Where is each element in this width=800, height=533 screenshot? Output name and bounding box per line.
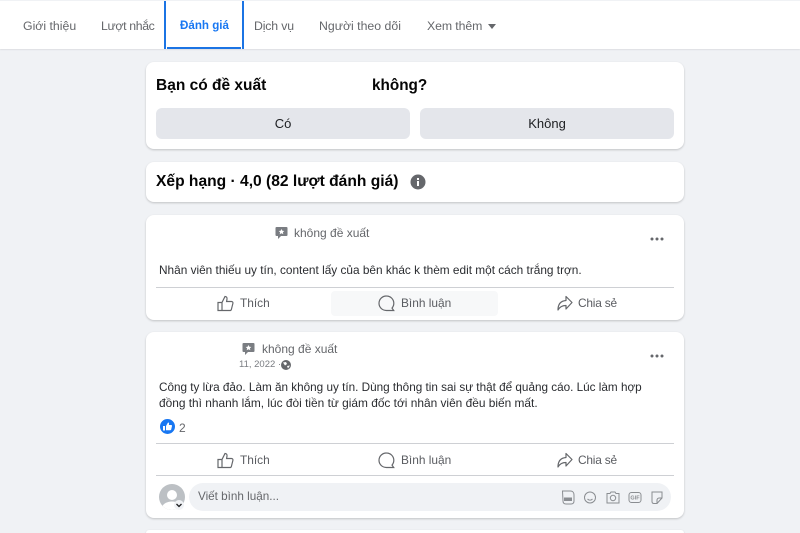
icon: like xyxy=(217,296,234,312)
icon: not recommended badge xyxy=(242,343,254,355)
icons: comment tools xyxy=(562,490,662,504)
navigation tabs bar xyxy=(0,1,800,49)
avatar placeholder xyxy=(159,484,185,510)
action: comment: Bình luận xyxy=(401,453,451,467)
action: share: Chia sẻ xyxy=(578,296,617,310)
panel: review 2 xyxy=(146,332,684,518)
heading: recommend question left: Bạn có đề xuất xyxy=(156,77,266,94)
heading: recommend question right: không? xyxy=(372,77,427,94)
icon: share xyxy=(557,452,573,468)
comment input xyxy=(189,483,671,511)
panel: next review (partial) xyxy=(146,530,684,533)
icon: comment xyxy=(378,452,395,468)
review 2 date: 11, 2022 · xyxy=(239,359,281,370)
icon: share xyxy=(557,296,573,311)
icon: more options xyxy=(650,354,664,358)
action: share: Chia sẻ xyxy=(578,453,617,467)
active tab underline xyxy=(167,47,241,49)
button: Có xyxy=(156,108,410,139)
review 2 status: không đề xuất xyxy=(262,342,337,356)
icons: comment tools: GIF xyxy=(630,496,640,502)
button: Không: Không xyxy=(528,116,566,131)
icon: like reaction xyxy=(160,419,175,434)
tab: Người theo dõi: Người theo dõi xyxy=(319,19,401,33)
icon: info xyxy=(410,174,426,190)
tab: Giới thiệu: Giới thiệu xyxy=(23,19,76,33)
panel: recommend question xyxy=(146,62,684,149)
reaction count: 2 xyxy=(179,421,186,435)
action: like: Thích xyxy=(240,296,270,310)
active tab: Đánh giá xyxy=(164,1,244,49)
active tab label: Đánh giá xyxy=(180,19,229,32)
review 1 text: Nhân viên thiếu uy tín, content lấy của bên khác k thèm edit một cách trắng trợn. xyxy=(159,263,582,277)
panel: rating summary xyxy=(146,162,684,202)
action: comment: Bình luận xyxy=(401,296,451,310)
review 2 text: đồng thì nhanh lắm, lúc đòi tiền từ giám đốc tới nhân viên đều biến mất. xyxy=(159,396,538,410)
icon: globe xyxy=(281,360,291,370)
button: Có: Có xyxy=(275,116,291,131)
heading: rating summary: Xếp hạng · 4,0 (82 lượt đánh giá) xyxy=(156,173,398,190)
review 1 status: không đề xuất xyxy=(294,226,369,240)
tab: Lượt nhắc: Lượt nhắc xyxy=(101,19,154,33)
button: Không xyxy=(420,108,674,139)
icon: like xyxy=(217,452,234,468)
icon: dropdown caret xyxy=(488,24,496,29)
comment placeholder: Viết bình luận... xyxy=(198,490,279,503)
icon: not recommended badge xyxy=(276,227,288,239)
panel: review 1 xyxy=(146,215,684,320)
tab: Xem thêm: Xem thêm xyxy=(427,19,482,33)
action: like: Thích xyxy=(240,453,270,467)
review 2 text xyxy=(159,381,642,410)
hovered comment button background xyxy=(331,291,498,316)
icon: more options xyxy=(650,238,664,240)
tab: Dịch vụ: Dịch vụ xyxy=(254,19,294,33)
icon: comment xyxy=(378,295,395,312)
review 2 text: Công ty lừa đảo. Làm ăn không uy tín. Dùng thông tin sai sự thật để quảng cáo. Lúc làm hợp xyxy=(159,381,642,394)
